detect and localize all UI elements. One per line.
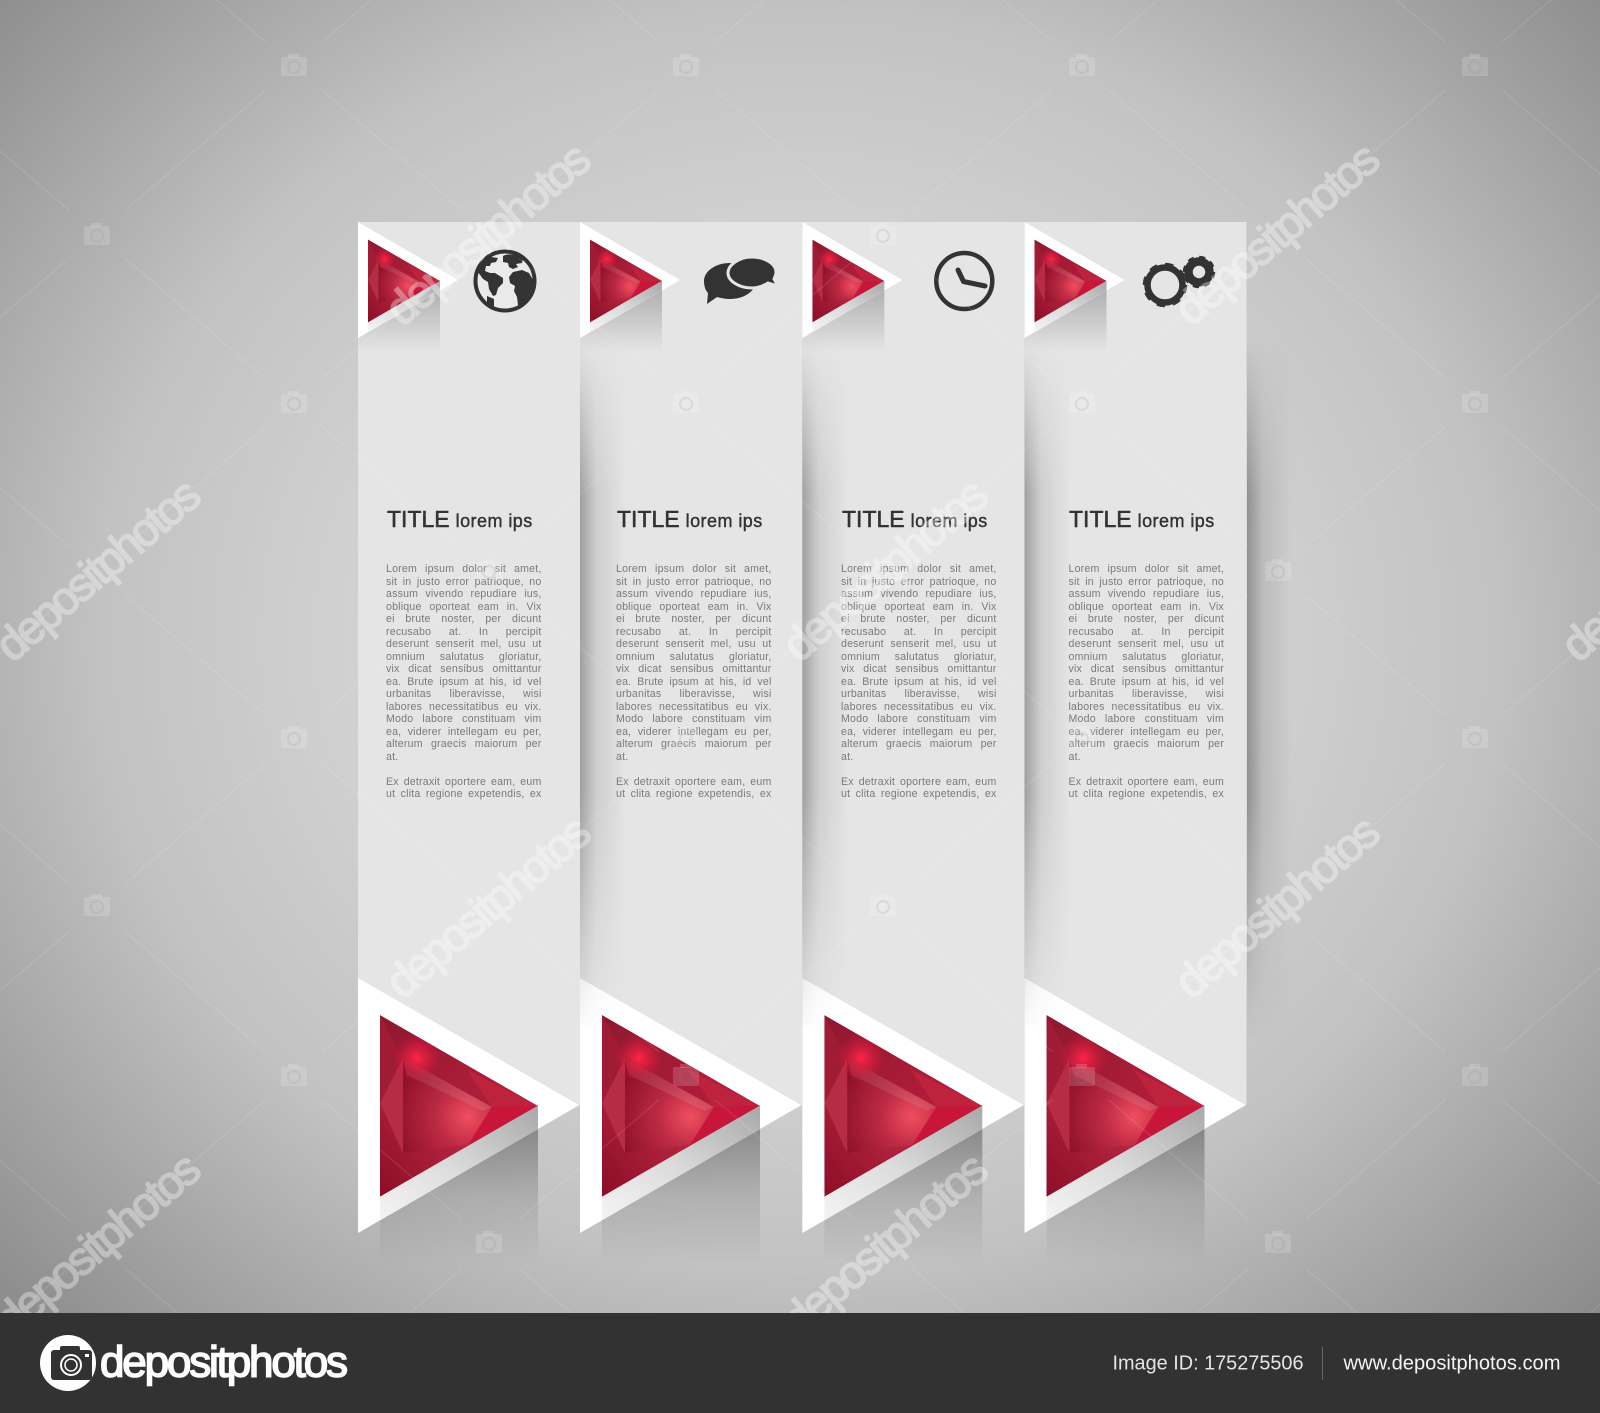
body text column 3: Ex detraxit oportere eam, eum <box>841 776 996 788</box>
body text column 2: sit in justo error patrioque, no <box>616 576 772 588</box>
body text column 3: vix dicat sensibus omittantur <box>841 663 996 675</box>
watermark camera marks <box>84 54 1488 1253</box>
body text column 3: ea, viderer intellegam eu per, <box>841 726 996 738</box>
body text column 3: Lorem ipsum dolor sit amet, <box>841 563 996 575</box>
body text column 3: recusabo at. In percipit <box>841 626 996 638</box>
body text column 3: labores necessitatibus eu vix. <box>841 701 996 713</box>
body text column 4: omnium salutatus gloriatur, <box>1068 651 1224 663</box>
icon: clock <box>936 253 992 309</box>
footer logo icon <box>40 1335 96 1391</box>
body text column 3: oblique oporteat eam in. Vix <box>841 601 996 613</box>
panel body 3 <box>802 222 1024 1105</box>
body text column 1: assum vivendo repudiare ius, <box>386 588 542 600</box>
panel shadow 2 <box>580 358 616 1013</box>
large red triangle 1 <box>358 978 580 1268</box>
body text column 4: sit in justo error patrioque, no <box>1068 576 1224 588</box>
column 3 <box>802 222 1024 1268</box>
body text column 2: deserunt senserit mel, usu ut <box>616 638 772 650</box>
body text column 1: deserunt senserit mel, usu ut <box>386 638 542 650</box>
body text column 2: vix dicat sensibus omittantur <box>616 663 772 675</box>
body text column 4: Ex detraxit oportere eam, eum <box>1068 776 1224 788</box>
body text column 2: assum vivendo repudiare ius, <box>616 588 772 600</box>
body text column 4 <box>1068 563 1224 800</box>
body text column 2 <box>616 563 772 800</box>
body text column 2: Lorem ipsum dolor sit amet, <box>616 563 772 575</box>
body text column 3: omnium salutatus gloriatur, <box>841 651 996 663</box>
panel shadow 4 <box>1024 357 1060 1012</box>
panel body 4 <box>1024 222 1246 1105</box>
body text column 3: assum vivendo repudiare ius, <box>841 588 996 600</box>
icon: globe <box>476 252 534 310</box>
body text column 4: recusabo at. In percipit <box>1068 626 1224 638</box>
small red triangle 4 <box>1024 222 1124 352</box>
body text column 1: Modo labore constituam vim <box>386 713 542 725</box>
body text column 4: labores necessitatibus eu vix. <box>1068 701 1224 713</box>
body text column 3: at. <box>841 751 853 763</box>
body text column 1: urbanitas liberavisse, wisi <box>386 688 542 700</box>
small red triangle 3 <box>802 222 902 352</box>
title column 4: TITLE lorem ips <box>1069 506 1215 532</box>
body text column 1: oblique oporteat eam in. Vix <box>386 601 542 613</box>
image id: Image ID: 175275506 <box>1112 1352 1304 1374</box>
body text column 4: Lorem ipsum dolor sit amet, <box>1068 563 1224 575</box>
title column 3: TITLE lorem ips <box>842 506 988 532</box>
body text column 4: ei brute noster, per dicunt <box>1068 613 1224 625</box>
body text column 1: ut clita regione expetendis, ex <box>386 788 542 800</box>
body text column 4: assum vivendo repudiare ius, <box>1068 588 1224 600</box>
body text column 2: at. <box>616 751 628 763</box>
icon: gears <box>1145 258 1214 305</box>
large red triangle 3 <box>802 978 1024 1268</box>
large red triangle 2 <box>580 978 802 1268</box>
body text column 2: recusabo at. In percipit <box>616 626 772 638</box>
body text column 1: vix dicat sensibus omittantur <box>386 663 542 675</box>
body text column 4: ea. Brute ipsum at his, id vel <box>1068 676 1224 688</box>
footer logo wordmark: depositphotos <box>100 1338 348 1386</box>
body text column 1: Ex detraxit oportere eam, eum <box>386 776 542 788</box>
body text column 4: oblique oporteat eam in. Vix <box>1068 601 1224 613</box>
icon: speech bubbles <box>704 257 778 304</box>
body text column 1: sit in justo error patrioque, no <box>386 576 542 588</box>
body text column 2: ea, viderer intellegam eu per, <box>616 726 772 738</box>
body text column 1: omnium salutatus gloriatur, <box>386 651 542 663</box>
body text column 2: omnium salutatus gloriatur, <box>616 651 772 663</box>
body text column 3: deserunt senserit mel, usu ut <box>841 638 996 650</box>
body text column 3: ea. Brute ipsum at his, id vel <box>841 676 996 688</box>
body text column 1: at. <box>386 751 398 763</box>
body text column 3: urbanitas liberavisse, wisi <box>841 688 996 700</box>
body text column 4: alterum graecis maiorum per <box>1068 738 1224 750</box>
body text column 1: alterum graecis maiorum per <box>386 738 542 750</box>
body text column 2: urbanitas liberavisse, wisi <box>616 688 772 700</box>
body text column 3: ei brute noster, per dicunt <box>841 613 996 625</box>
body text column 4: at. <box>1068 751 1081 763</box>
column 2 <box>580 222 802 1268</box>
right edge shadow <box>1247 362 1280 1006</box>
body text column 1: ea. Brute ipsum at his, id vel <box>386 676 542 688</box>
body text column 2: labores necessitatibus eu vix. <box>616 701 772 713</box>
body text column 1: Lorem ipsum dolor sit amet, <box>386 563 542 575</box>
panel body 1 <box>358 222 580 1105</box>
body text column 1: labores necessitatibus eu vix. <box>386 701 542 713</box>
large red triangle 4 <box>1024 978 1246 1268</box>
body text column 4: urbanitas liberavisse, wisi <box>1068 688 1224 700</box>
body text column 3 <box>841 563 996 800</box>
small red triangle 2 <box>580 222 680 352</box>
body text column 4: vix dicat sensibus omittantur <box>1068 663 1224 675</box>
body text column 2: ut clita regione expetendis, ex <box>616 788 772 800</box>
website url: www.depositphotos.com <box>1342 1352 1560 1374</box>
body text column 3: sit in justo error patrioque, no <box>841 576 996 588</box>
body text column 2: oblique oporteat eam in. Vix <box>616 601 772 613</box>
footer separator <box>1322 1347 1323 1380</box>
body text column 1: ei brute noster, per dicunt <box>386 613 542 625</box>
panel shadow 3 <box>802 357 838 1012</box>
body text column 4: ut clita regione expetendis, ex <box>1068 788 1224 800</box>
small red triangle 1 <box>358 222 458 352</box>
body text column 2: alterum graecis maiorum per <box>616 738 772 750</box>
body text column 3: alterum graecis maiorum per <box>841 738 996 750</box>
body text column 2: Modo labore constituam vim <box>616 713 772 725</box>
body text column 1: recusabo at. In percipit <box>386 626 542 638</box>
title column 2: TITLE lorem ips <box>617 506 763 532</box>
body text column 3: Modo labore constituam vim <box>841 713 996 725</box>
panel body 2 <box>580 222 802 1105</box>
column 1 <box>358 222 580 1268</box>
body text column 4: ea, viderer intellegam eu per, <box>1068 726 1224 738</box>
body text column 4: deserunt senserit mel, usu ut <box>1068 638 1224 650</box>
footer band <box>0 1313 1600 1413</box>
body text column 3: ut clita regione expetendis, ex <box>841 788 996 800</box>
body text column 2: ea. Brute ipsum at his, id vel <box>616 676 772 688</box>
body text column 2: Ex detraxit oportere eam, eum <box>616 776 772 788</box>
body text column 1 <box>386 563 542 800</box>
body text column 2: ei brute noster, per dicunt <box>616 613 772 625</box>
column 4 <box>1024 222 1246 1268</box>
body text column 1: ea, viderer intellegam eu per, <box>386 726 542 738</box>
body text column 4: Modo labore constituam vim <box>1068 713 1224 725</box>
title column 1: TITLE lorem ips <box>387 506 533 532</box>
